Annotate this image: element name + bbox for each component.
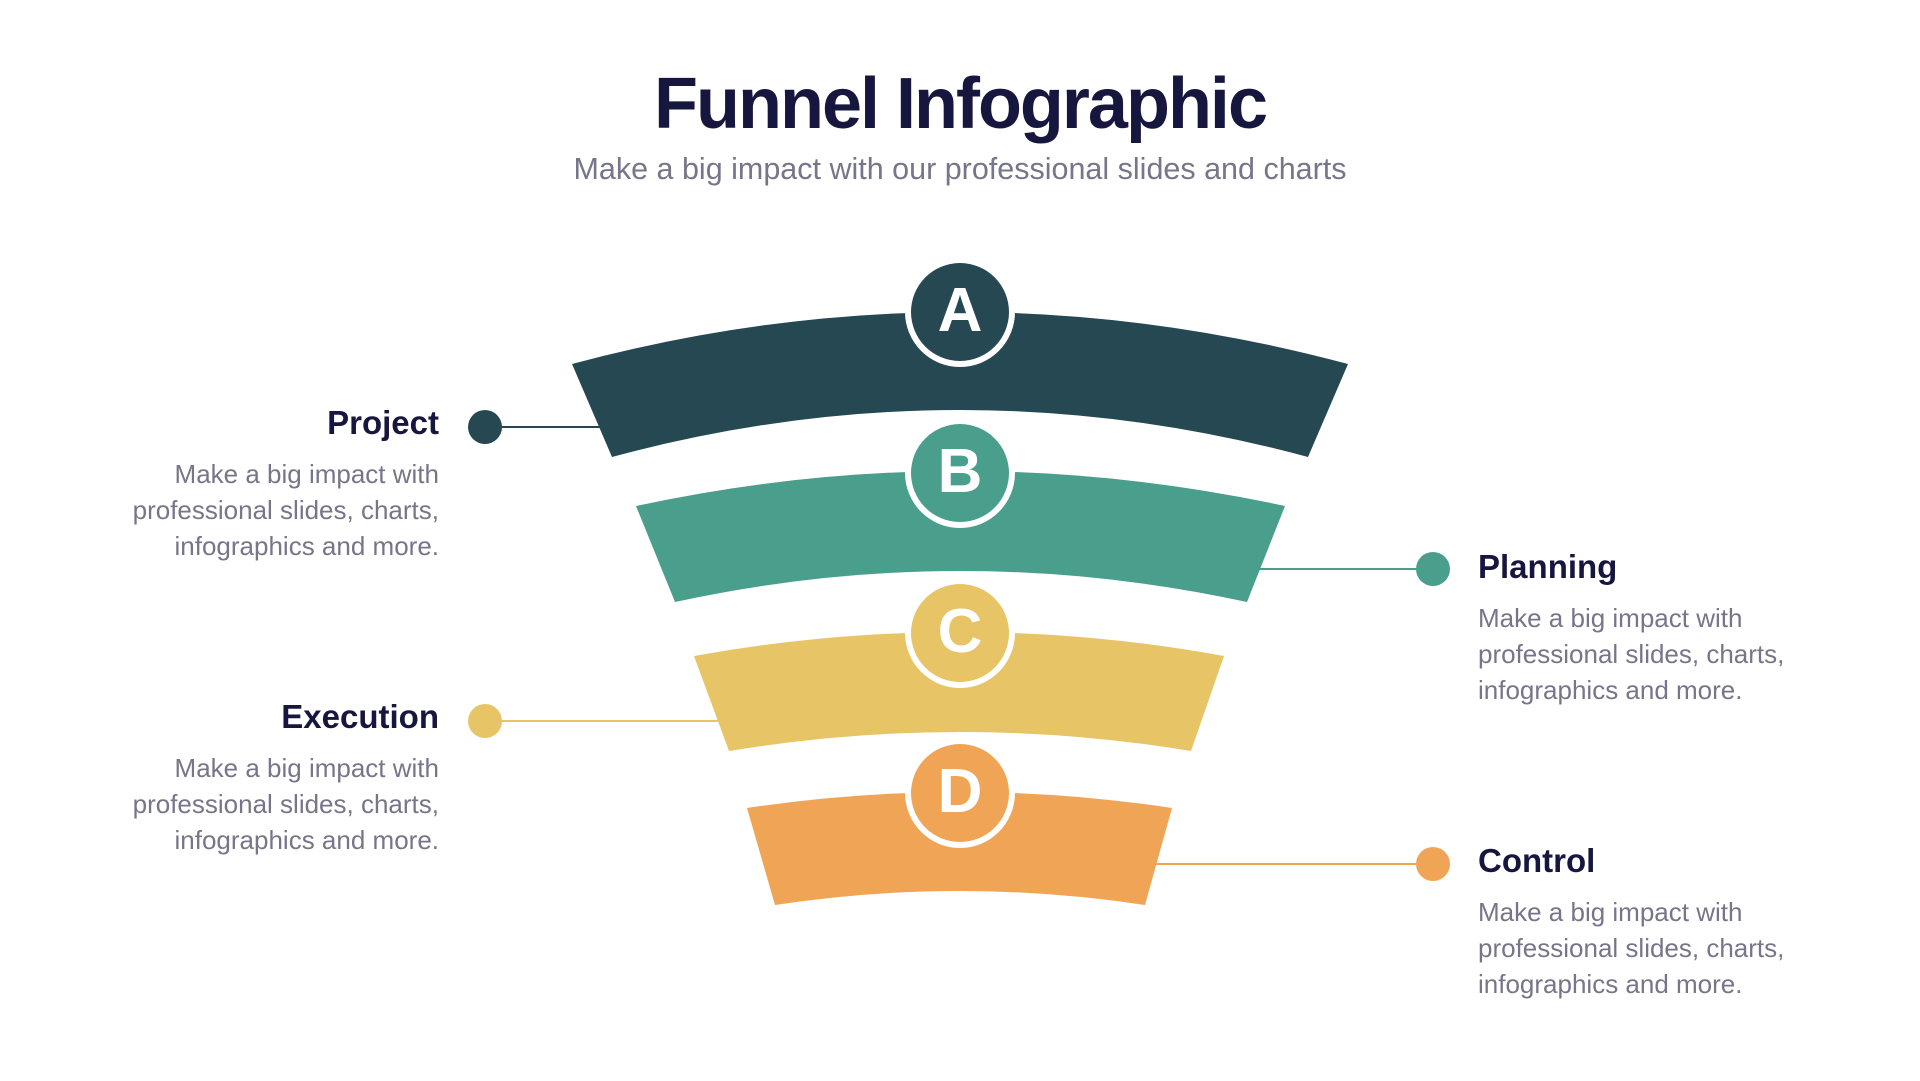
label: Project: Project xyxy=(327,404,439,441)
label: Execution: professional slides, charts, xyxy=(133,789,439,819)
title: Funnel Infographic xyxy=(654,64,1266,144)
label: Planning: infographics and more. xyxy=(1478,675,1742,705)
label: Planning: Planning xyxy=(1478,548,1617,585)
band C: C xyxy=(938,597,982,666)
connector lines xyxy=(485,427,1433,864)
label: Control: infographics and more. xyxy=(1478,969,1742,999)
label: Project xyxy=(133,404,439,561)
label: Project: professional slides, charts, xyxy=(133,495,439,525)
label: Planning: professional slides, charts, xyxy=(1478,639,1784,669)
band C xyxy=(694,578,1224,751)
label: Planning xyxy=(1478,548,1784,705)
label: Execution xyxy=(133,698,439,855)
label: Planning: Make a big impact with xyxy=(1478,603,1742,633)
label: Execution: Make a big impact with xyxy=(175,753,439,783)
label: Project: Make a big impact with xyxy=(175,459,439,489)
band D xyxy=(747,738,1172,905)
band D: D xyxy=(938,757,982,826)
band B: B xyxy=(938,437,982,506)
dots xyxy=(468,410,1450,881)
label: Execution: Execution xyxy=(281,698,439,735)
label: Control: professional slides, charts, xyxy=(1478,933,1784,963)
label: Control xyxy=(1478,842,1784,999)
label: Project: infographics and more. xyxy=(175,531,439,561)
band B xyxy=(636,418,1285,602)
label: Control: Control xyxy=(1478,842,1595,879)
band A: A xyxy=(938,276,982,345)
label: Execution: infographics and more. xyxy=(175,825,439,855)
label: Control: Make a big impact with xyxy=(1478,897,1742,927)
band A xyxy=(572,257,1348,457)
subtitle: Make a big impact with our professional slides and charts xyxy=(573,152,1347,186)
